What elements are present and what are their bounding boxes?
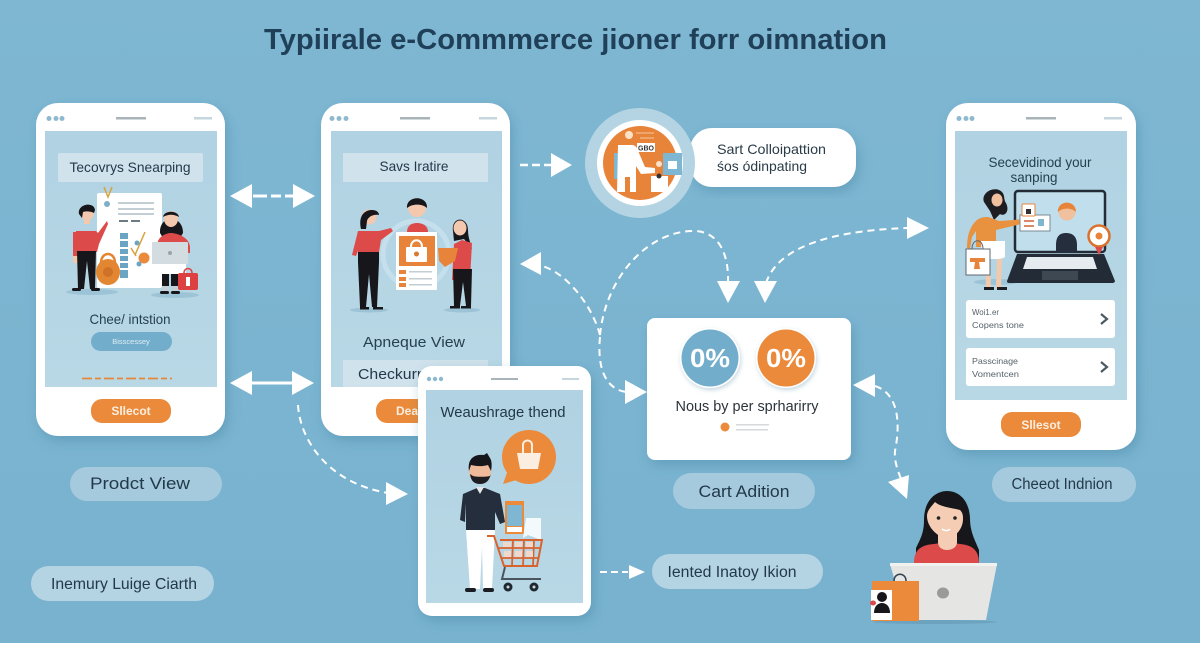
arrow: to badge: [520, 153, 572, 177]
phone 2 checkout bar: Checkurm: [358, 366, 430, 383]
stat circle blue: [680, 328, 740, 388]
stat circle blue: 0%: [690, 343, 730, 373]
arrow: double between card and phone 4: [754, 217, 929, 303]
icon: orange speech bubble with bag: [502, 430, 556, 484]
illustration: woman with laptop video call: [966, 189, 1115, 290]
phone 1 progress dashes: [82, 378, 172, 380]
illustration: customer with laptop and bag: [870, 491, 997, 624]
icon: circular badge with cashier: [585, 108, 695, 218]
title: Typiirale e-Commmerce jioner forr oimnation: [264, 24, 887, 56]
phone 1 screen: [45, 131, 217, 387]
panel: phone 1 product discovery: [36, 103, 225, 436]
label: checkout: Cheeot Indnion: [1012, 476, 1112, 493]
arrow: curved back to phone 2: [520, 252, 600, 335]
phone 1 button: Sllecot: [111, 404, 151, 418]
phone 1 heading: Tecovrys Snearping: [70, 159, 190, 175]
panel: cart collaboration badge and pill: [585, 108, 856, 218]
arrow: dashed double product to save: [230, 184, 315, 208]
phone 4 button: [1001, 412, 1081, 437]
phone 3 status bar: [427, 377, 579, 381]
arrow: phone 3 to inventory label: [600, 565, 645, 579]
card legend: [720, 422, 769, 432]
arrow: solid double: [230, 371, 314, 395]
label: inventory: [31, 566, 214, 601]
illustration: three people with padlock form: [350, 198, 480, 312]
option row 1: Copens tone: [972, 320, 1024, 330]
phone 3 screen: [426, 390, 583, 603]
label: inventory: Inemury Luige Ciarth: [51, 576, 197, 593]
option row 2: Vomentcen: [972, 369, 1019, 379]
illustration: two people with document: [66, 187, 199, 298]
arrow: from branch up over to stats card top: [600, 231, 740, 335]
panel: phone 4 checkout review: [946, 103, 1136, 450]
phone 4 heading: sanping: [1010, 169, 1058, 185]
phone 2 screen: [331, 131, 502, 387]
label: cart addition: [673, 473, 815, 509]
icon: circular badge with cashier: GBO: [638, 146, 655, 152]
stat circle orange: [756, 328, 816, 388]
callout pill: śos ódinpating: [717, 158, 807, 174]
phone 1 status bar: [46, 116, 212, 121]
label: inventory action: [652, 554, 823, 589]
label: inventory action: Iented Inatoy Ikion: [668, 564, 796, 581]
card caption: Nous by per sprharirry: [676, 398, 819, 415]
label: checkout: [992, 467, 1136, 502]
phone 2 checkout bar: [343, 360, 488, 387]
option row 1: Woi1.er: [972, 307, 999, 317]
arrow: curved to phone 3: [298, 405, 408, 505]
phone 1 blue pill: Bisscessey: [112, 337, 150, 346]
phone 4 heading: Secevidinod your: [988, 154, 1092, 170]
phone 2 button: Dea: [396, 404, 418, 418]
arrow: card to customer: [853, 374, 909, 499]
phone 2 heading: Savs Iratire: [380, 158, 449, 174]
label: product view: Prodct View: [90, 474, 191, 493]
label: product view: [70, 467, 222, 501]
arrow: curved to stats card left: [599, 337, 647, 404]
phone 4 screen: [955, 131, 1127, 400]
phone 3 heading: Weaushrage thend: [440, 405, 566, 421]
phone 4 heading: [988, 154, 1092, 185]
phone 1 heading: [58, 153, 203, 182]
label: cart addition: Cart Adition: [698, 483, 790, 501]
phone 4 button: Sllesot: [1021, 418, 1061, 432]
phone 2 status bar: [330, 116, 497, 121]
panel: phone 2 save: [321, 103, 510, 436]
phone 1 button: [91, 399, 171, 423]
option row 2: Passcinage: [972, 356, 1018, 366]
phone 4 status bar: [956, 116, 1122, 121]
phone 2 button: [376, 399, 456, 423]
option row 2: [966, 348, 1115, 386]
option row 1: [966, 300, 1115, 338]
callout pill: [690, 128, 856, 187]
phone 1 blue pill: [91, 332, 172, 351]
illustration: man with shopping cart: [460, 453, 542, 592]
stat circle orange: 0%: [766, 343, 806, 373]
panel: phone 3 shopper: [418, 366, 591, 616]
callout pill: Sart Colloipattion: [717, 141, 826, 157]
phone 2 caption: Apneque View: [363, 334, 465, 351]
panel: cart addition stats card: [647, 318, 851, 460]
phone 2 heading: [343, 153, 488, 182]
phone 1 caption: Chee/ intstion: [90, 311, 170, 327]
